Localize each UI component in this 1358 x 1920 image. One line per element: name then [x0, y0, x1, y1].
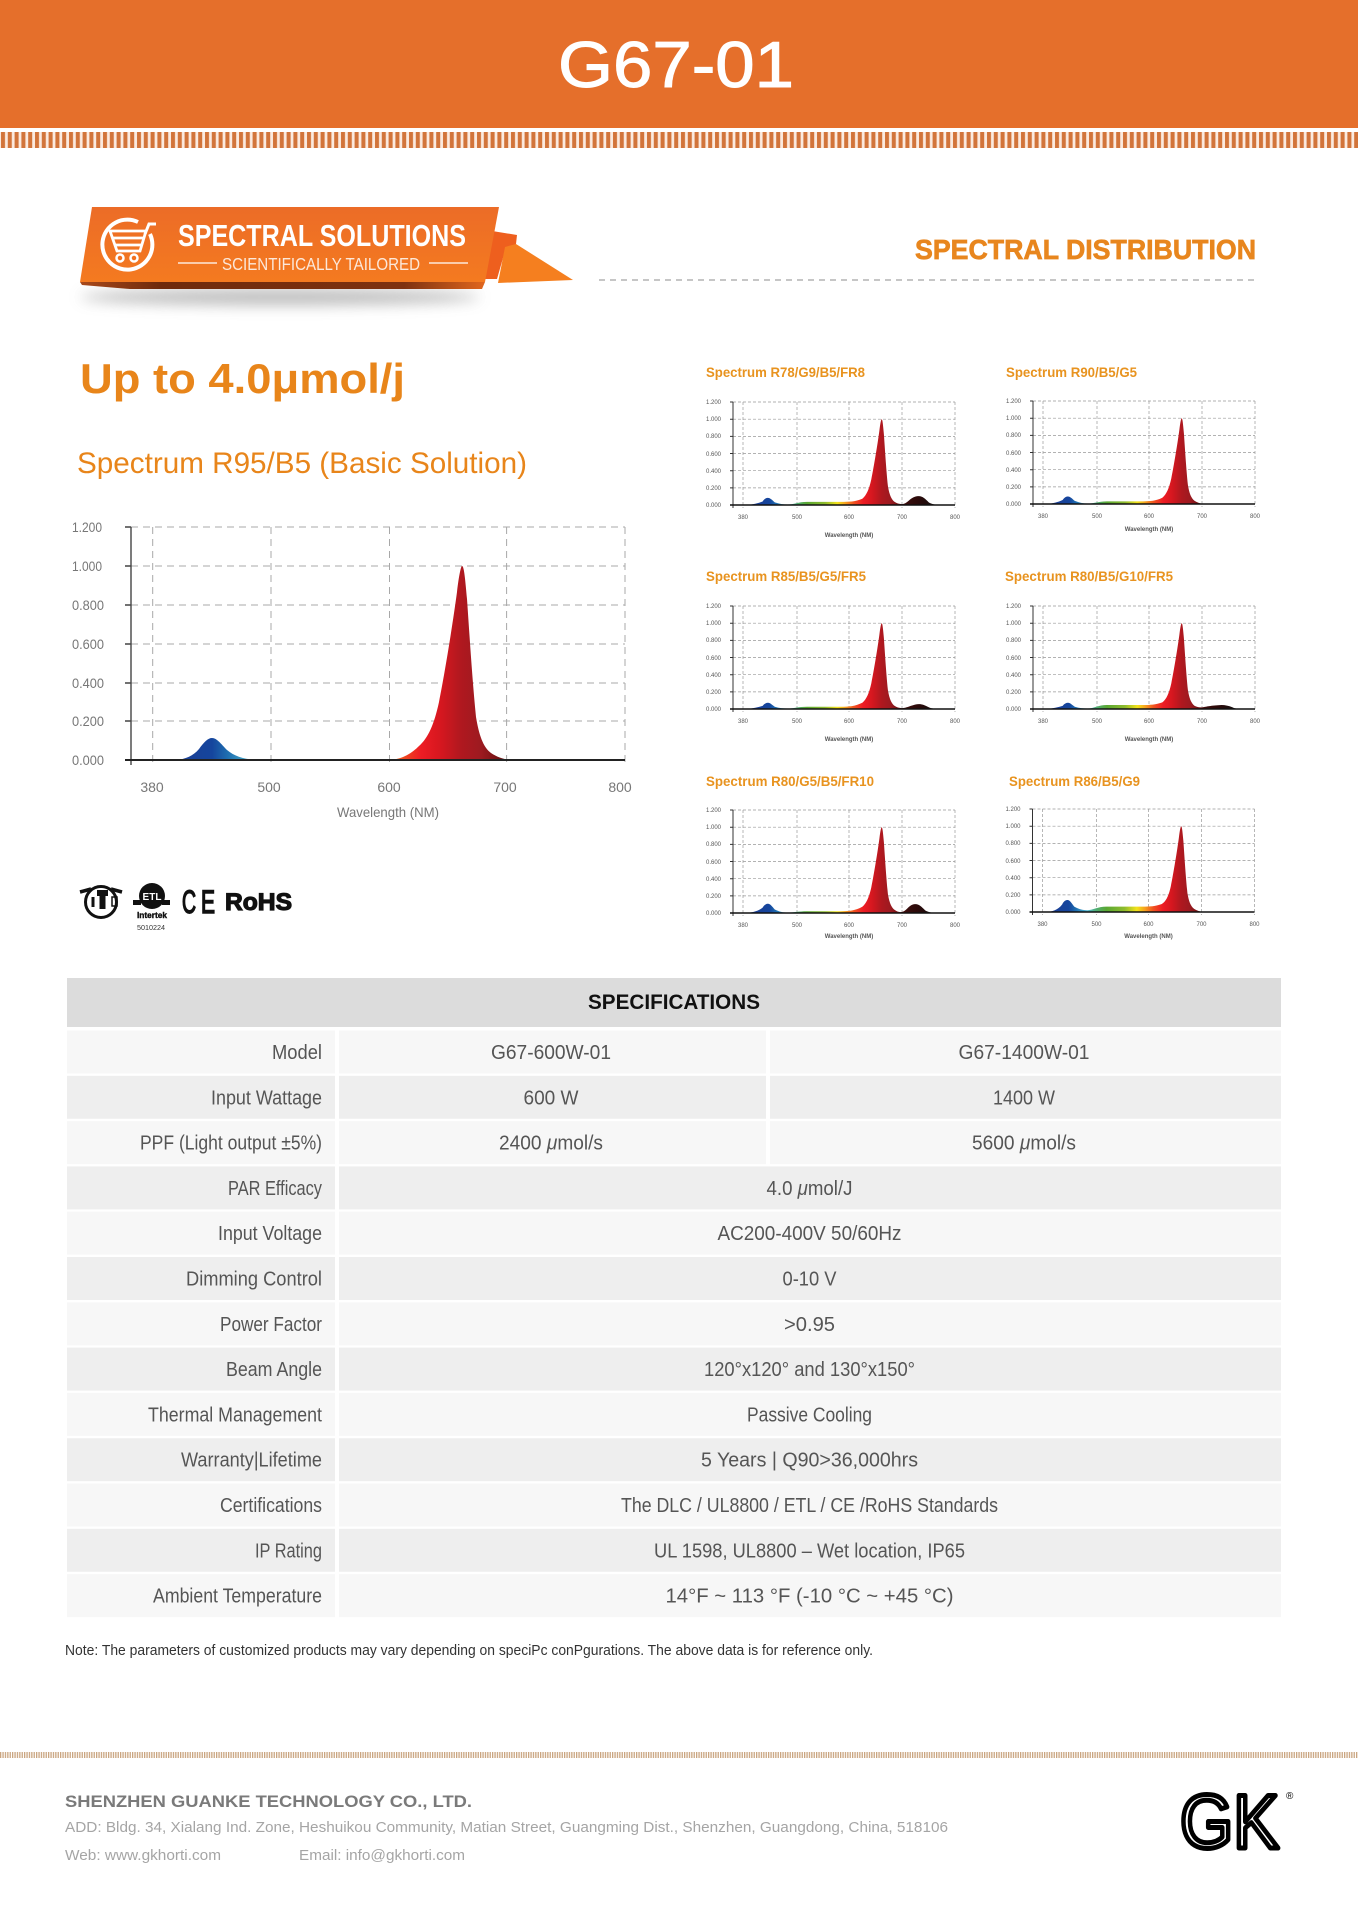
row: model [67, 1030, 1281, 1074]
small chart: R78/G9/B5/FR8: 0.400 [706, 469, 722, 475]
small chart: R90/B5/G5: 600 [1144, 514, 1155, 520]
main chart: spectrum R95/B5: 800 [608, 779, 632, 795]
row: power factor [67, 1302, 1281, 1345]
row: IP rating [67, 1529, 1281, 1572]
small chart: R90/B5/G5: Wavelength (NM) [1125, 527, 1173, 533]
main chart: spectrum R95/B5: 0.600 [72, 636, 104, 652]
row: input wattage [67, 1076, 1281, 1119]
small chart: R80/B5/G10/FR5: Spectrum R80/B5/G10/FR5 [1005, 568, 1173, 584]
small chart: R90/B5/G5: 500 [1092, 514, 1103, 520]
row: input voltage: AC200-400V 50/60Hz [718, 1223, 902, 1245]
small chart: R78/G9/B5/FR8: 1.000 [706, 417, 722, 423]
small chart: R80/G5/B5/FR10: 0.400 [706, 877, 722, 883]
small chart: R85/B5/G5/FR5 [706, 568, 961, 743]
row: PAR efficacy: 4.0 μmol/J [766, 1178, 852, 1200]
small chart: R80/B5/G10/FR5: 0.200 [1006, 690, 1022, 696]
small chart: R90/B5/G5: 0.800 [1006, 433, 1022, 439]
small chart: R85/B5/G5/FR5: 1.200 [706, 604, 722, 610]
row: certifications [67, 1484, 1281, 1526]
banner: spectral solutions [80, 207, 573, 305]
small chart: R78/G9/B5/FR8: 600 [844, 515, 855, 521]
icon: ETL badge: 5010224 [137, 923, 165, 932]
small chart: R80/G5/B5/FR10: 500 [792, 923, 803, 929]
small chart: R80/B5/G10/FR5: 0.400 [1006, 673, 1022, 679]
row: beam angle: Beam Angle [226, 1359, 322, 1381]
icon: ETL badge: Intertek [137, 910, 167, 920]
icon: UL badge [80, 886, 122, 918]
small chart: R78/G9/B5/FR8 [706, 364, 961, 539]
small chart: R85/B5/G5/FR5: 500 [792, 719, 803, 725]
row: model: Model [272, 1042, 322, 1064]
main chart: spectrum R95/B5: 700 [493, 779, 517, 795]
company name: SHENZHEN GUANKE TECHNOLOGY CO., LTD. [65, 1792, 472, 1811]
small chart: R78/G9/B5/FR8: 500 [792, 515, 803, 521]
small chart: R90/B5/G5: Spectrum R90/B5/G5 [1006, 364, 1137, 380]
small chart: R90/B5/G5: 700 [1197, 514, 1208, 520]
main chart: spectrum R95/B5: 0.000 [72, 752, 104, 768]
small chart: R90/B5/G5: 0.000 [1006, 502, 1022, 508]
small chart: R86/B5/G9: 0.200 [1006, 893, 1021, 899]
row: PAR efficacy [67, 1166, 1281, 1209]
certification icons [80, 883, 292, 932]
icon: CE mark: C [182, 884, 196, 920]
small chart: R78/G9/B5/FR8: 800 [950, 515, 961, 521]
small chart: R86/B5/G9: 800 [1249, 922, 1260, 928]
row: beam angle [67, 1348, 1281, 1391]
row: model: G67-600W-01 [491, 1042, 611, 1064]
main chart: spectrum R95/B5: 1.200 [72, 519, 102, 535]
row: thermal management: Passive Cooling [747, 1404, 872, 1426]
small chart: R85/B5/G5/FR5: 1.000 [706, 621, 722, 627]
small chart: R80/B5/G10/FR5: 0.800 [1006, 638, 1022, 644]
small chart: R80/G5/B5/FR10: Wavelength (NM) [825, 934, 873, 940]
row: ambient temperature: Ambient Temperature [153, 1586, 322, 1608]
small chart: R78/G9/B5/FR8: Wavelength (NM) [825, 533, 873, 539]
icon: ETL badge [133, 883, 170, 932]
icon: ETL badge: ETL [143, 892, 161, 903]
small chart: R86/B5/G9: 700 [1196, 922, 1207, 928]
small chart: R80/B5/G10/FR5: 1.000 [1006, 621, 1022, 627]
row: IP rating: UL 1598, UL8800 – Wet location, IP65 [654, 1540, 965, 1562]
header band [0, 0, 1358, 128]
small chart: R85/B5/G5/FR5: 0.600 [706, 656, 722, 662]
main chart: spectrum R95/B5: Wavelength (NM) [337, 804, 439, 820]
row: input voltage [67, 1212, 1281, 1255]
heading: basic spectrum: Spectrum R95/B5 (Basic Solution) [77, 447, 527, 480]
row: ambient temperature [67, 1574, 1281, 1617]
small chart: R78/G9/B5/FR8: 0.000 [706, 503, 722, 509]
heading: spectral distribution: SPECTRAL DISTRIBUTION [915, 234, 1256, 265]
small chart: R80/G5/B5/FR10: 0.600 [706, 860, 722, 866]
row: IP rating: IP Rating [255, 1540, 322, 1562]
small chart: R86/B5/G9 [1006, 773, 1260, 940]
logo: GK: GK [1180, 1780, 1279, 1865]
small chart: R85/B5/G5/FR5: 0.000 [706, 707, 722, 713]
small chart: R85/B5/G5/FR5: 0.800 [706, 638, 722, 644]
row: thermal management [67, 1393, 1281, 1436]
main chart: spectrum R95/B5: 380 [140, 779, 164, 795]
row: power factor: >0.95 [784, 1314, 835, 1336]
small chart: R85/B5/G5/FR5: Spectrum R85/B5/G5/FR5 [706, 568, 866, 584]
small chart: R86/B5/G9: 0.000 [1006, 910, 1021, 916]
small chart: R90/B5/G5: 380 [1038, 514, 1049, 520]
small chart: R86/B5/G9: Wavelength (NM) [1124, 934, 1173, 940]
specifications table [67, 978, 1281, 1617]
row: PAR efficacy: PAR Efficacy [228, 1178, 322, 1200]
website: Web: www.gkhorti.com [65, 1847, 221, 1864]
icon: RoHS mark: RoHS [225, 889, 292, 916]
small chart: R80/G5/B5/FR10: 1.000 [706, 825, 722, 831]
row: thermal management: Thermal Management [148, 1404, 322, 1426]
small chart: R80/B5/G10/FR5: 0.000 [1006, 707, 1022, 713]
small chart: R78/G9/B5/FR8: 0.600 [706, 452, 722, 458]
row: input wattage: 1400 W [993, 1087, 1055, 1109]
row: certifications: Certifications [220, 1495, 322, 1517]
small chart: R80/B5/G10/FR5: 700 [1197, 719, 1208, 725]
small chart: R86/B5/G9: 1.200 [1006, 807, 1021, 813]
small chart: R90/B5/G5 [1006, 364, 1261, 533]
small chart: R90/B5/G5: 0.200 [1006, 485, 1022, 491]
main chart: spectrum R95/B5: 500 [257, 779, 281, 795]
row: PPF: PPF (Light output ±5%) [140, 1133, 322, 1155]
small chart: R90/B5/G5: 1.200 [1006, 399, 1022, 405]
small chart: R78/G9/B5/FR8: 1.200 [706, 400, 722, 406]
small chart: R80/G5/B5/FR10: 0.200 [706, 894, 722, 900]
small chart: R86/B5/G9: 0.600 [1006, 859, 1021, 865]
main chart: spectrum R95/B5: 600 [377, 779, 401, 795]
small chart: R90/B5/G5: 0.400 [1006, 468, 1022, 474]
main chart: spectrum R95/B5: 0.800 [72, 597, 104, 613]
small chart: R86/B5/G9: 500 [1091, 922, 1102, 928]
table heading [67, 978, 1281, 1027]
small chart: R80/G5/B5/FR10: 800 [950, 923, 961, 929]
row: input voltage: Input Voltage [218, 1223, 322, 1245]
small chart: R80/G5/B5/FR10: 0.800 [706, 842, 722, 848]
small chart: R86/B5/G9: 380 [1037, 922, 1048, 928]
small chart: R80/G5/B5/FR10: 1.200 [706, 808, 722, 814]
logo: GK: ® [1286, 1791, 1294, 1802]
small chart: R85/B5/G5/FR5: 0.400 [706, 673, 722, 679]
icon: cart [102, 220, 156, 270]
row: certifications: The DLC / UL8800 / ETL / CE /RoHS Standards [621, 1495, 998, 1517]
small chart: R78/G9/B5/FR8: 0.200 [706, 486, 722, 492]
row: input wattage: Input Wattage [211, 1087, 322, 1109]
small chart: R80/B5/G10/FR5: Wavelength (NM) [1125, 737, 1173, 743]
small chart: R85/B5/G5/FR5: 380 [738, 719, 749, 725]
small chart: R90/B5/G5: 1.000 [1006, 416, 1022, 422]
small chart: R85/B5/G5/FR5: Wavelength (NM) [825, 737, 873, 743]
small chart: R80/G5/B5/FR10: 380 [738, 923, 749, 929]
small chart: R86/B5/G9: 1.000 [1006, 824, 1021, 830]
row: model: G67-1400W-01 [958, 1042, 1090, 1064]
table heading: SPECIFICATIONS [588, 991, 760, 1014]
small chart: R80/B5/G10/FR5: 500 [1092, 719, 1103, 725]
small chart: R85/B5/G5/FR5: 800 [950, 719, 961, 725]
row: power factor: Power Factor [220, 1314, 322, 1336]
banner subheading: SCIENTIFICALLY TAILORED [222, 254, 420, 274]
banner heading: SPECTRAL SOLUTIONS [178, 218, 466, 253]
small chart: R78/G9/B5/FR8: Spectrum R78/G9/B5/FR8 [706, 364, 865, 380]
small chart: R80/G5/B5/FR10: 700 [897, 923, 908, 929]
title: G67-01 [558, 28, 794, 101]
small chart: R80/B5/G10/FR5: 600 [1144, 719, 1155, 725]
small chart: R90/B5/G5: 0.600 [1006, 451, 1022, 457]
row: PPF: 2400 μmol/s [499, 1133, 603, 1155]
small chart: R80/G5/B5/FR10: 0.000 [706, 911, 722, 917]
small chart: R85/B5/G5/FR5: 0.200 [706, 690, 722, 696]
small chart: R85/B5/G5/FR5: 700 [897, 719, 908, 725]
small chart: R86/B5/G9: 600 [1143, 922, 1154, 928]
row: beam angle: 120°x120° and 130°x150° [704, 1359, 915, 1381]
row: warranty: Warranty|Lifetime [181, 1450, 322, 1472]
note: Note: The parameters of customized products may vary depending on speciPc conPgurations. The above data is for reference only. [65, 1642, 873, 1659]
small chart: R80/B5/G10/FR5: 380 [1038, 719, 1049, 725]
row: dimming control: 0-10 V [782, 1268, 837, 1290]
small chart: R86/B5/G9: 0.800 [1006, 841, 1021, 847]
row: input wattage: 600 W [524, 1087, 579, 1109]
row: PPF [67, 1121, 1281, 1164]
small chart: R80/G5/B5/FR10 [706, 773, 961, 940]
email: Email: info@gkhorti.com [299, 1847, 465, 1864]
small chart: R80/B5/G10/FR5: 800 [1250, 719, 1261, 725]
main chart: spectrum R95/B5: 0.200 [72, 713, 104, 729]
small chart: R80/G5/B5/FR10: 600 [844, 923, 855, 929]
main chart: spectrum R95/B5 [72, 519, 632, 820]
row: PPF: 5600 μmol/s [972, 1133, 1076, 1155]
small chart: R80/B5/G10/FR5: 1.200 [1006, 604, 1022, 610]
main chart: spectrum R95/B5: 0.400 [72, 675, 104, 691]
small chart: R78/G9/B5/FR8: 700 [897, 515, 908, 521]
small chart: R90/B5/G5: 800 [1250, 514, 1261, 520]
address: ADD: Bldg. 34, Xialang Ind. Zone, Heshuikou Community, Matian Street, Guangming Dist., Shenzhen, Guangdong, China, 518106 [65, 1819, 948, 1836]
small chart: R78/G9/B5/FR8: 0.800 [706, 434, 722, 440]
small chart: R78/G9/B5/FR8: 380 [738, 515, 749, 521]
heading: efficacy: Up to 4.0μmol/j [80, 355, 405, 402]
row: dimming control: Dimming Control [186, 1268, 322, 1290]
footer contact details [65, 1792, 948, 1864]
main chart: spectrum R95/B5: 1.000 [72, 558, 102, 574]
small chart: R86/B5/G9: Spectrum R86/B5/G9 [1009, 773, 1140, 789]
small chart: R86/B5/G9: 0.400 [1006, 876, 1021, 882]
row: dimming control [67, 1257, 1281, 1300]
row: ambient temperature: 14°F ~ 113 °F (-10 °C ~ +45 °C) [666, 1586, 954, 1608]
icon: CE mark: E [201, 884, 215, 920]
small chart: R80/G5/B5/FR10: Spectrum R80/G5/B5/FR10 [706, 773, 874, 789]
small chart: R85/B5/G5/FR5: 600 [844, 719, 855, 725]
row: warranty [67, 1438, 1281, 1481]
row: warranty: 5 Years | Q90>36,000hrs [701, 1450, 918, 1472]
small chart: R80/B5/G10/FR5: 0.600 [1006, 656, 1022, 662]
small chart: R80/B5/G10/FR5 [1005, 568, 1261, 743]
